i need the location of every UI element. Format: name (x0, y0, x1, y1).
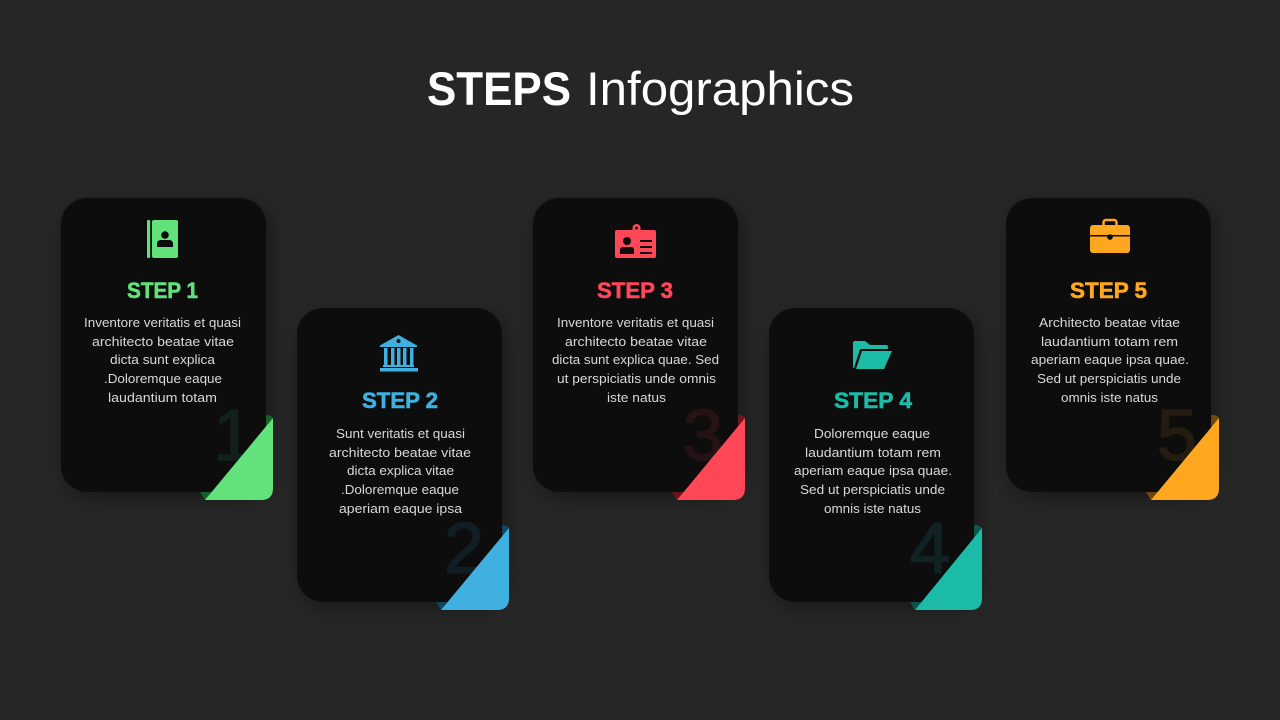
number 5: 5 (1157, 396, 1197, 476)
text block: step 1: .Doloremque eaque (104, 372, 222, 386)
number 2: 2 (444, 509, 484, 589)
text block: step 2: dicta explica vitae (347, 464, 454, 478)
text block: step 4: laudantium totam rem (805, 446, 941, 460)
panel: step 2 (297, 308, 509, 610)
text block: step 4: aperiam eaque ipsa quae. (794, 464, 952, 478)
text block: step 5: Architecto beatae vitae (1039, 316, 1180, 330)
number 1: 1 (213, 396, 253, 476)
text block: step 3: ut perspiciatis unde omnis (557, 372, 716, 386)
text block: step 4: Sed ut perspiciatis unde (800, 483, 945, 497)
panel: step 1 (61, 198, 273, 500)
text block: step 5: laudantium totam rem (1041, 335, 1178, 349)
corner fold: red (677, 418, 745, 500)
title (427, 62, 854, 115)
panel: step 4 (769, 308, 982, 610)
heading: step 2: STEP 2 (362, 388, 438, 413)
corner fold: green (205, 418, 273, 500)
text block: step 5 (1031, 316, 1189, 405)
text block: step 3: iste natus (607, 391, 666, 405)
text block: step 1: Inventore veritatis et quasi (84, 316, 241, 330)
text block: step 5: Sed ut perspiciatis unde (1037, 372, 1181, 386)
icon: bank (380, 335, 418, 372)
text block: step 3 (552, 316, 719, 405)
text block: step 5: aperiam eaque ipsa quae. (1031, 353, 1189, 367)
corner fold: teal (915, 528, 982, 610)
text block: step 4 (794, 427, 952, 516)
text block: step 1 (84, 316, 241, 405)
text block: step 2 (329, 427, 471, 516)
number 3: 3 (683, 396, 723, 476)
heading: step 5: STEP 5 (1070, 278, 1147, 303)
icon: contact book (147, 220, 178, 258)
text block: step 4: Doloremque eaque (814, 427, 930, 441)
text block: step 3: dicta sunt explica quae. Sed (552, 353, 719, 367)
text block: step 5: omnis iste natus (1061, 391, 1158, 405)
corner fold: blue (441, 528, 509, 610)
text block: step 2: .Doloremque eaque (341, 483, 459, 497)
icon: open folder (853, 341, 892, 369)
title: Infographics (586, 62, 854, 115)
text block: step 3: architecto beatae vitae (565, 335, 707, 349)
panel: step 3 (533, 198, 745, 500)
text block: step 1: architecto beatae vitae (92, 335, 234, 349)
icon: id badge (615, 224, 656, 258)
text block: step 4: omnis iste natus (824, 502, 921, 516)
text block: step 1: laudantium totam (108, 391, 217, 405)
text block: step 2: aperiam eaque ipsa (339, 502, 462, 516)
text block: step 2: architecto beatae vitae (329, 446, 471, 460)
text block: step 3: Inventore veritatis et quasi (557, 316, 714, 330)
icon: briefcase (1090, 220, 1130, 253)
heading: step 4: STEP 4 (834, 388, 912, 413)
heading: step 3: STEP 3 (597, 278, 673, 303)
number 4: 4 (910, 509, 950, 589)
panel: step 5 (1006, 198, 1219, 500)
text block: step 1: dicta sunt explica (110, 353, 215, 367)
corner fold: orange (1151, 418, 1219, 500)
title: STEPS (427, 62, 571, 115)
text block: step 2: Sunt veritatis et quasi (336, 427, 465, 441)
heading: step 1: STEP 1 (127, 278, 198, 303)
